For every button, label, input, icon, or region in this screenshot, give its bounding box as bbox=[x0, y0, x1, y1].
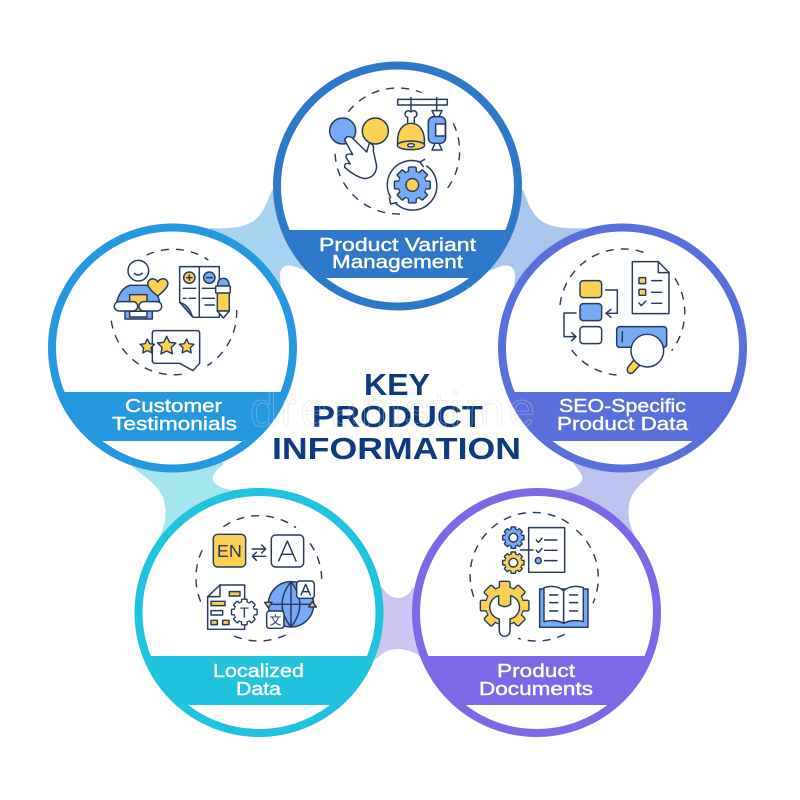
icon: product documents bbox=[470, 512, 598, 641]
panel: seo-specific product data bbox=[495, 228, 750, 468]
connector: top to left bbox=[210, 190, 330, 300]
icon: localized data: T bbox=[240, 606, 249, 622]
panel: product variant management bbox=[270, 66, 525, 306]
title bbox=[272, 367, 521, 466]
panel: localized data bbox=[130, 492, 388, 733]
watermark: dreamstime bbox=[250, 384, 535, 437]
label: product documents: Documents bbox=[479, 679, 593, 699]
label: localized data: Data bbox=[236, 679, 282, 699]
label: product variant management: Product Variant bbox=[319, 235, 476, 255]
label: product documents bbox=[479, 661, 593, 699]
label: seo-specific product data: Product Data bbox=[557, 414, 689, 434]
label: seo-specific product data: SEO-Specific bbox=[559, 396, 686, 416]
title: INFORMATION bbox=[272, 431, 521, 466]
icon: variant management bbox=[330, 88, 460, 214]
icon: localized data: EN bbox=[217, 541, 242, 561]
label: product variant management: Management bbox=[332, 252, 463, 272]
icon: localized data: 文 bbox=[269, 612, 281, 627]
connector: top to right bbox=[465, 190, 585, 300]
icon: testimonials bbox=[111, 249, 237, 375]
icon: localized data bbox=[196, 516, 322, 641]
connector: bottom-left to bottom-right bbox=[360, 587, 440, 660]
connector: right to bottom-right bbox=[550, 440, 660, 543]
label: seo-specific product data bbox=[557, 396, 689, 434]
label: product variant management bbox=[319, 235, 476, 272]
label: product documents: Product bbox=[497, 661, 575, 681]
label: customer testimonials bbox=[112, 396, 237, 434]
icon: seo data bbox=[560, 249, 685, 375]
title: PRODUCT bbox=[312, 399, 483, 434]
label: localized data: Localized bbox=[213, 661, 304, 681]
panel: customer testimonials bbox=[45, 228, 300, 468]
label: localized data bbox=[213, 661, 304, 699]
connector: left to bottom-left bbox=[132, 440, 245, 540]
label: customer testimonials: Testimonials bbox=[112, 414, 237, 434]
label: customer testimonials: Customer bbox=[125, 396, 222, 416]
title: KEY bbox=[364, 367, 430, 402]
panel: product documents bbox=[408, 492, 666, 733]
